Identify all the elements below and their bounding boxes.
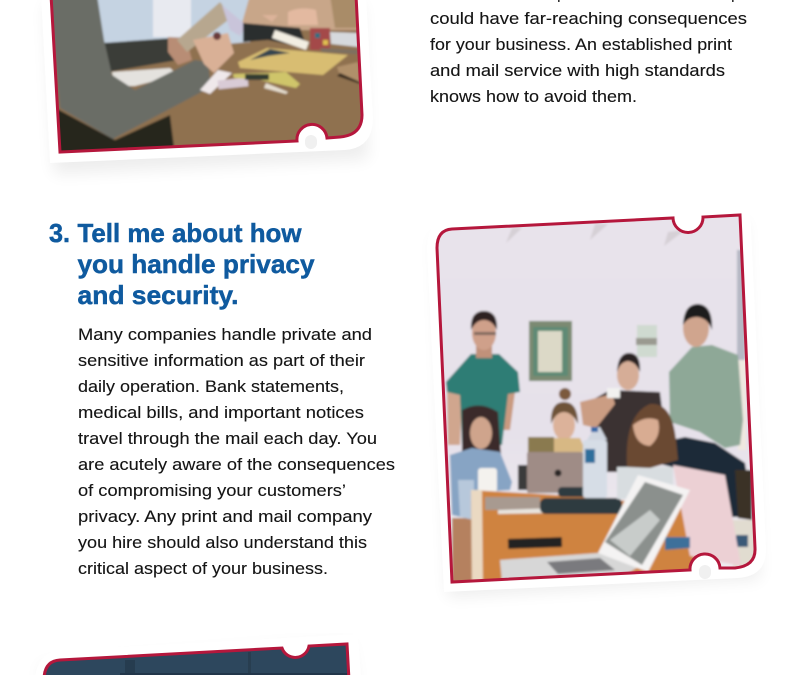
body paragraph: of compromising your customers’ [78,481,346,500]
body paragraph: privacy. Any print and mail company [78,507,373,526]
white laptop [500,475,690,582]
standing man in teal [446,311,520,445]
heading: question 3: Tell me about how [78,218,302,248]
heading: question 3: you handle privacy [78,249,315,279]
photo border [44,644,349,675]
photo scene: dark blue street [46,646,348,675]
heading: question 3: 3. [49,218,70,248]
text block: section 2 closing paragraph: for your business. An established print [430,35,732,54]
standing man in sage sweater [669,304,743,448]
text block: section 2 closing paragraph: could have far-reaching consequences [430,9,747,28]
frame notch [699,565,711,579]
panel: partial photo (bottom left) [42,642,350,675]
photo border [437,215,755,582]
photo border [51,0,362,152]
body paragraph: are acutely aware of the consequences [78,455,395,474]
body paragraph: you hire should also understand this [78,533,367,552]
body paragraph: daily operation. Bank statements, [78,377,344,396]
body paragraph [78,325,395,578]
body paragraph: Many companies handle private and [78,325,372,344]
body paragraph: travel through the mail each day. You [78,429,377,448]
text block: section 2 closing paragraph: knows how to avoid them. [430,87,637,106]
body paragraph: critical aspect of your business. [78,559,328,578]
panel: photo of team around laptops (right) [427,205,766,597]
wall picture [529,321,572,381]
heading: question 3: and security. [78,280,238,310]
heading: question 3 [49,218,315,310]
panel: section 3 text [49,218,395,578]
photo scene: colleagues around a table [430,210,760,590]
photo scene: hands, books and markers on a desk [45,0,370,155]
standing woman in black [580,353,666,472]
body paragraph: medical bills, and important notices [78,403,364,422]
seated woman on left [450,405,512,585]
seated woman with bun [550,386,584,454]
panel: photo of team at a table with books (top left) [41,0,373,174]
text block: section 2 closing paragraph: and mail service with high standards [430,61,725,80]
pink laptop [673,465,741,566]
frame notch [305,135,317,149]
table [480,489,695,579]
body paragraph: sensitive information as part of their [78,351,365,370]
text block: section 2 closing paragraph [430,0,747,106]
seated woman in dark jacket [627,404,748,517]
laptop and bottle [527,427,607,498]
